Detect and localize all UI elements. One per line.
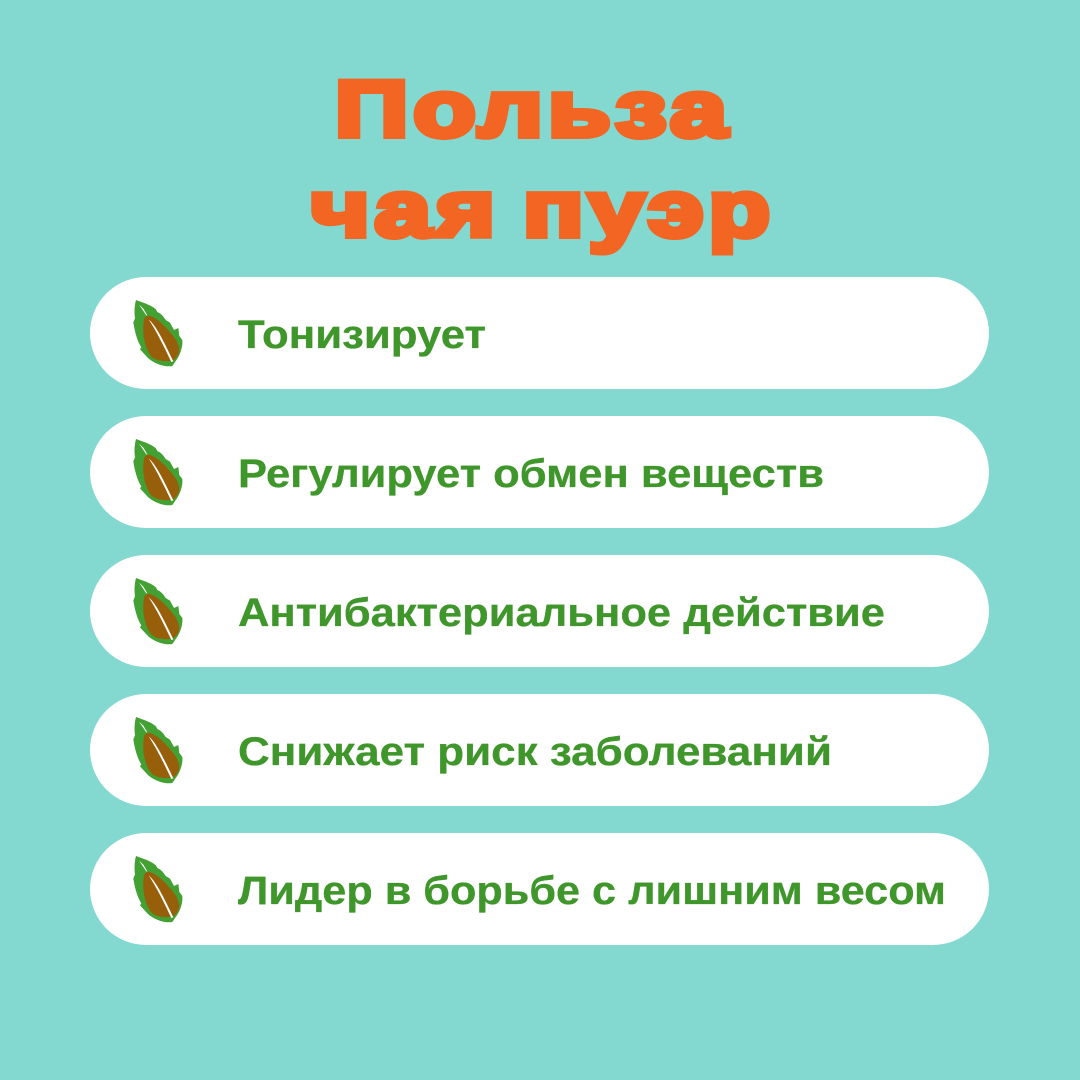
label: benefit 3: Антибактериальное действие [238,591,885,635]
label: benefit 1: Тонизирует [238,313,486,357]
panel: benefit 1 [90,277,989,389]
title [311,64,775,253]
label: benefit 2: Регулирует обмен веществ [238,452,824,496]
panel: benefit 3 [90,555,989,667]
icon: leaf [133,300,182,366]
panel: benefit 4 [90,694,989,806]
label: benefit 5: Лидер в борьбе с лишним весом [238,869,946,913]
panel: benefit 5 [90,833,989,945]
title: пуэр [523,164,775,253]
icon: leaf [133,439,182,505]
label: benefit 4: Снижает риск заболеваний [238,730,832,774]
title: чая [311,164,500,253]
icon: leaf [133,578,182,644]
title: Польза [335,64,732,153]
panel: benefit 2 [90,416,989,528]
icon: leaf [133,856,182,922]
icon: leaf [133,717,182,783]
